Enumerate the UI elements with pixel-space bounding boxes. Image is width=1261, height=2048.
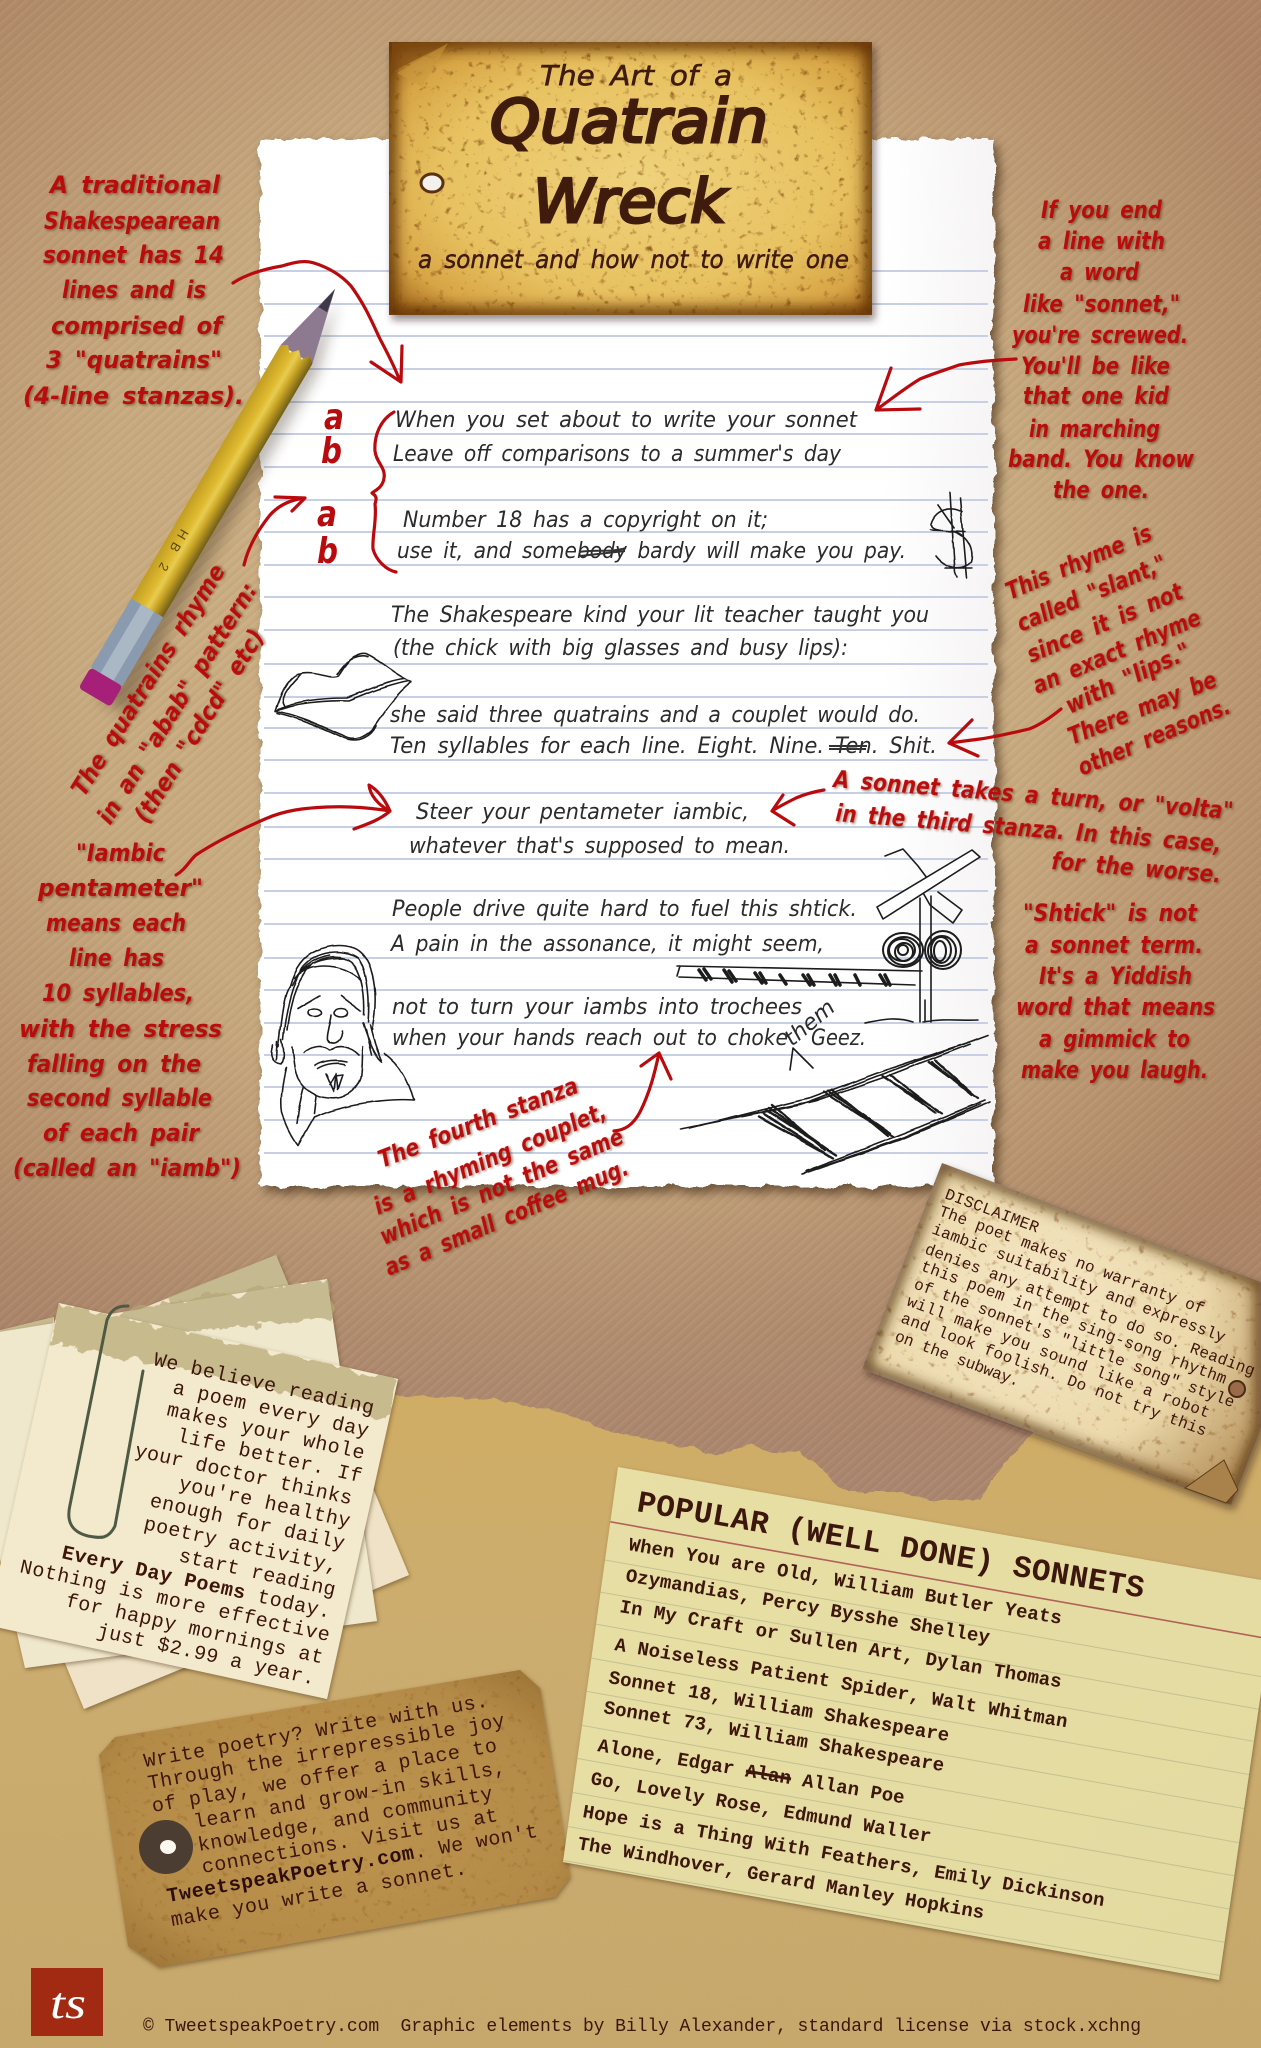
icon: folded corner and tack — [1185, 1381, 1245, 1503]
card: popular sonnets — [515, 1467, 1261, 1986]
annotation: slant rhyme: an exact rhyme — [1028, 603, 1205, 700]
annotation: iambic pentameter: pentameter" — [37, 874, 203, 902]
annotation: sonnet word: that one kid — [1023, 382, 1170, 410]
title line: The Art of a: The Art of a — [540, 59, 732, 92]
icon: paperclip — [69, 1306, 143, 1537]
annotation: fourth stanza: which is not the same — [375, 1122, 628, 1251]
poem: sonnet text: Ten syllables for each line. Eight. Nine. Ten. Shit. — [390, 734, 937, 759]
annotation: iambic pentameter: means each — [46, 909, 186, 937]
annotation: 14 lines: Shakespearean — [44, 207, 220, 235]
arrow: iambic line — [176, 785, 390, 875]
insertion: them with caret: them — [780, 995, 840, 1052]
annotation: iambic pentameter: with the stress — [19, 1015, 222, 1043]
sonnet list: Sonnet 73, William Shakespeare — [602, 1697, 946, 1777]
annotation: shtick: It's a Yiddish — [1039, 962, 1192, 990]
strike-throughs — [579, 548, 867, 749]
tag text: learn and grow-in skills, — [192, 1757, 507, 1835]
pencil grade label: HB 2 — [155, 527, 192, 574]
annotation: iambic pentameter: line has — [69, 944, 164, 972]
note text — [17, 1349, 376, 1691]
poem: sonnet text: People drive quite hard to fuel this shtick. — [392, 897, 857, 922]
annotation: 14 lines: lines and is — [62, 276, 206, 304]
sonnet list: The Windhover, Gerard Manley Hopkins — [576, 1833, 986, 1924]
tag text: knowledge, and community — [196, 1783, 495, 1858]
sonnet list: Ozymandias, Percy Bysshe Shelley — [624, 1565, 992, 1649]
annotation: iambic pentameter: (called an "iamb") — [13, 1154, 241, 1182]
annotation: 14 lines: comprised of — [51, 312, 224, 340]
note text: Every Day Poems today. — [59, 1542, 333, 1625]
poem: sonnet text: Steer your pentameter iambic, — [416, 800, 749, 825]
tag text: of play, we offer a place to — [150, 1735, 499, 1819]
poem: sonnet text: when your hands reach out to choke — [392, 1026, 788, 1051]
sketch: dollar sign — [930, 493, 972, 578]
sonnet list: Sonnet 18, William Shakespeare — [607, 1667, 951, 1747]
annotation: sonnet word: a word — [1060, 258, 1140, 286]
annotation: sonnet word: band. You know — [1008, 445, 1195, 473]
disclaimer text: of the sonnet's "little song" style — [911, 1276, 1237, 1412]
icon: grommet — [139, 1820, 193, 1874]
annotation: volta — [831, 765, 1234, 889]
annotation: slant rhyme: since it is not — [1022, 577, 1188, 669]
sonnet list: In My Craft or Sullen Art, Dylan Thomas — [618, 1596, 1063, 1693]
annotation: shtick — [1016, 899, 1215, 1084]
tag text: make you write a sonnet. — [169, 1858, 469, 1933]
panel: torn tan folder — [0, 1380, 1261, 2048]
subtitle: a sonnet and how not to write one — [418, 245, 849, 274]
sketch: Shakespeare portrait — [271, 946, 414, 1145]
logo: ts: ts — [50, 1979, 86, 2028]
poem: sonnet text: Geez. — [811, 1026, 866, 1051]
annotation: fourth stanza: as a small coffee mug. — [380, 1153, 633, 1282]
note text: We believe reading — [151, 1349, 376, 1421]
annotation: iambic pentameter: second syllable — [27, 1084, 212, 1112]
annotation: iambic pentameter: falling on the — [27, 1050, 201, 1078]
annotation: sonnet word: in marching — [1029, 415, 1160, 443]
annotation: 14 lines: sonnet has 14 — [43, 241, 224, 269]
note text: you're healthy — [176, 1473, 352, 1534]
annotation: 14 lines: A traditional — [48, 171, 221, 199]
arrow: sonnet rhyme word — [876, 359, 1016, 410]
annotation: ab rhyme letters: b — [317, 531, 338, 572]
poem: sonnet text: Number 18 has a copyright on it; — [403, 508, 768, 533]
poem: sonnet text: A pain in the assonance, it might seem, — [389, 932, 824, 957]
annotation: fourth stanza — [369, 1071, 633, 1282]
sonnet list: Alone, Edgar Alan Allan Poe — [596, 1735, 906, 1809]
annotation: shtick: a sonnet term. — [1025, 931, 1203, 959]
annotation: sonnet word: the one. — [1053, 476, 1149, 504]
sonnet list: Go, Lovely Rose, Edmund Waller — [589, 1768, 933, 1848]
annotation: iambic pentameter: of each pair — [43, 1119, 201, 1147]
annotation: sonnet word: you're screwed. — [1012, 321, 1188, 349]
annotation: iambic pentameter — [13, 839, 241, 1182]
tag: write with us — [99, 1670, 570, 1967]
note text: Nothing is more effective — [17, 1556, 332, 1648]
annotation: volta: for the worse. — [1051, 847, 1222, 889]
panel: torn notebook paper — [260, 139, 994, 1186]
disclaimer text: will make you sound like a robot — [904, 1293, 1212, 1422]
annotation: sonnet word: like "sonnet," — [1023, 290, 1180, 318]
sketch: railroad track — [681, 1035, 990, 1174]
tag text: TweetspeakPoetry.com. We won't — [165, 1821, 540, 1909]
annotation: shtick: make you laugh. — [1021, 1056, 1208, 1084]
annotation: sonnet word — [1008, 196, 1195, 504]
tag text: connections. Visit us at — [200, 1805, 500, 1880]
poem: sonnet text: Leave off comparisons to a summer's day — [393, 442, 842, 467]
annotation: fourth stanza: is a rhyming couplet, — [369, 1097, 610, 1221]
tag text — [142, 1691, 540, 1933]
title tag card — [389, 42, 872, 315]
annotation: sonnet word: a line with — [1038, 227, 1165, 255]
disclaimer text — [892, 1186, 1257, 1441]
annotation: shtick: word that means — [1016, 993, 1215, 1021]
annotation: ab rhyme letters: b — [321, 431, 342, 472]
annotation: slant rhyme: called "slant," — [1012, 549, 1171, 638]
brace — [372, 412, 396, 572]
stacked notes behind — [0, 1255, 409, 1709]
note text: your doctor thinks — [132, 1440, 354, 1511]
disclaimer text: iambic suitability and expressly — [929, 1221, 1228, 1347]
footer credit: © TweetspeakPoetry.com Graphic elements by Billy Alexander, standard license via stock.xchng — [143, 2017, 1141, 2037]
arrow: couplet — [614, 1053, 671, 1131]
pencil — [78, 280, 351, 715]
icon: tag hole — [421, 174, 443, 192]
sonnet list: A Noiseless Patient Spider, Walt Whitman — [613, 1634, 1069, 1733]
poem: sonnet text: (the chick with big glasses and busy lips): — [393, 636, 848, 661]
note text: just $2.99 a year. — [94, 1620, 317, 1691]
annotation: slant rhyme — [1001, 519, 1234, 782]
disclaimer text: DISCLAIMER — [942, 1186, 1042, 1237]
annotation: slant rhyme: This rhyme is — [1001, 519, 1156, 606]
disclaimer card — [862, 1163, 1261, 1505]
annotation: iambic pentameter: "Iambic — [76, 839, 165, 867]
disclaimer text: and look foolish. Do not try this — [898, 1310, 1209, 1441]
sketch: railroad crossing — [677, 849, 980, 1023]
annotation: ab rhyme letters: a — [317, 494, 337, 535]
card heading: POPULAR (WELL DONE) SONNETS — [634, 1486, 1147, 1607]
disclaimer text: denies any attempt to do so. Reading — [922, 1241, 1257, 1381]
poem: sonnet text: When you set about to write your sonnet — [395, 408, 858, 433]
annotation: ab rhyme letters — [317, 397, 344, 572]
sonnet list — [576, 1534, 1106, 1924]
sketch: lips — [275, 654, 412, 740]
note text: makes your whole — [164, 1399, 367, 1466]
tag text: Write poetry? Write with us. — [142, 1691, 490, 1774]
annotation: 14 lines — [23, 171, 244, 410]
annotation: 14 lines: 3 "quatrains" — [46, 346, 222, 374]
arrow: second quatrain — [244, 497, 305, 565]
annotation: fourth stanza: The fourth stanza — [374, 1071, 582, 1174]
poem: sonnet text: The Shakespeare kind your lit teacher taught you — [391, 603, 929, 628]
note text: enough for daily — [147, 1490, 347, 1556]
note text: life better. If — [174, 1425, 364, 1489]
annotation: sonnet word: You'll be like — [1021, 352, 1170, 380]
poem: sonnet text: not to turn your iambs into trochees — [392, 995, 802, 1020]
note: Every Day Poems — [0, 1303, 398, 1699]
disclaimer text: The poet makes no warranty of — [936, 1203, 1207, 1318]
annotation: shtick: a gimmick to — [1039, 1025, 1190, 1053]
sonnet list: When You are Old, William Butler Yeats — [627, 1534, 1063, 1630]
annotation: sonnet word: If you end — [1041, 196, 1163, 224]
disclaimer text: this poem in the sing-song rhythm — [918, 1258, 1229, 1389]
note text: a poem every day — [170, 1377, 371, 1443]
annotation: iambic pentameter: 10 syllables, — [42, 979, 194, 1007]
logo: ts — [31, 1968, 103, 2036]
tag text: Through the irrepressible joy — [146, 1710, 507, 1796]
annotation: abab pattern: The quatrains rhyme — [65, 559, 231, 801]
annotation: abab pattern: in an "abab" pattern: — [91, 578, 263, 829]
arrow: volta — [772, 790, 824, 825]
poem: sonnet text — [389, 408, 937, 1070]
note text: start reading — [176, 1545, 338, 1603]
note text: poetry activity, — [141, 1513, 340, 1579]
sonnet list: Hope is a Thing With Feathers, Emily Dickinson — [581, 1801, 1106, 1912]
poem: sonnet text: whatever that's supposed to mean. — [409, 834, 790, 859]
annotation: shtick: "Shtick" is not — [1023, 899, 1198, 927]
arrow: slant rhyme word — [949, 709, 1061, 756]
title line: Quatrain: Quatrain — [490, 87, 768, 157]
poem: sonnet text: she said three quatrains and a couplet would do. — [390, 703, 920, 728]
note text: for happy mornings at — [63, 1590, 325, 1670]
title line: Wreck: Wreck — [533, 167, 728, 237]
arrow: stanza start — [233, 262, 402, 382]
poem: sonnet text: use it, and somebody bardy will make you pay. — [397, 539, 906, 564]
disclaimer text: on the subway. — [892, 1328, 1022, 1391]
annotation: slant rhyme: There may be — [1064, 665, 1221, 751]
annotation: slant rhyme: with "lips." — [1061, 637, 1195, 719]
annotation: 14 lines: (4-line stanzas). — [23, 382, 244, 410]
annotation: ab rhyme letters: a — [324, 397, 344, 438]
annotation: abab pattern: (then "cdcd" etc) — [128, 624, 270, 828]
